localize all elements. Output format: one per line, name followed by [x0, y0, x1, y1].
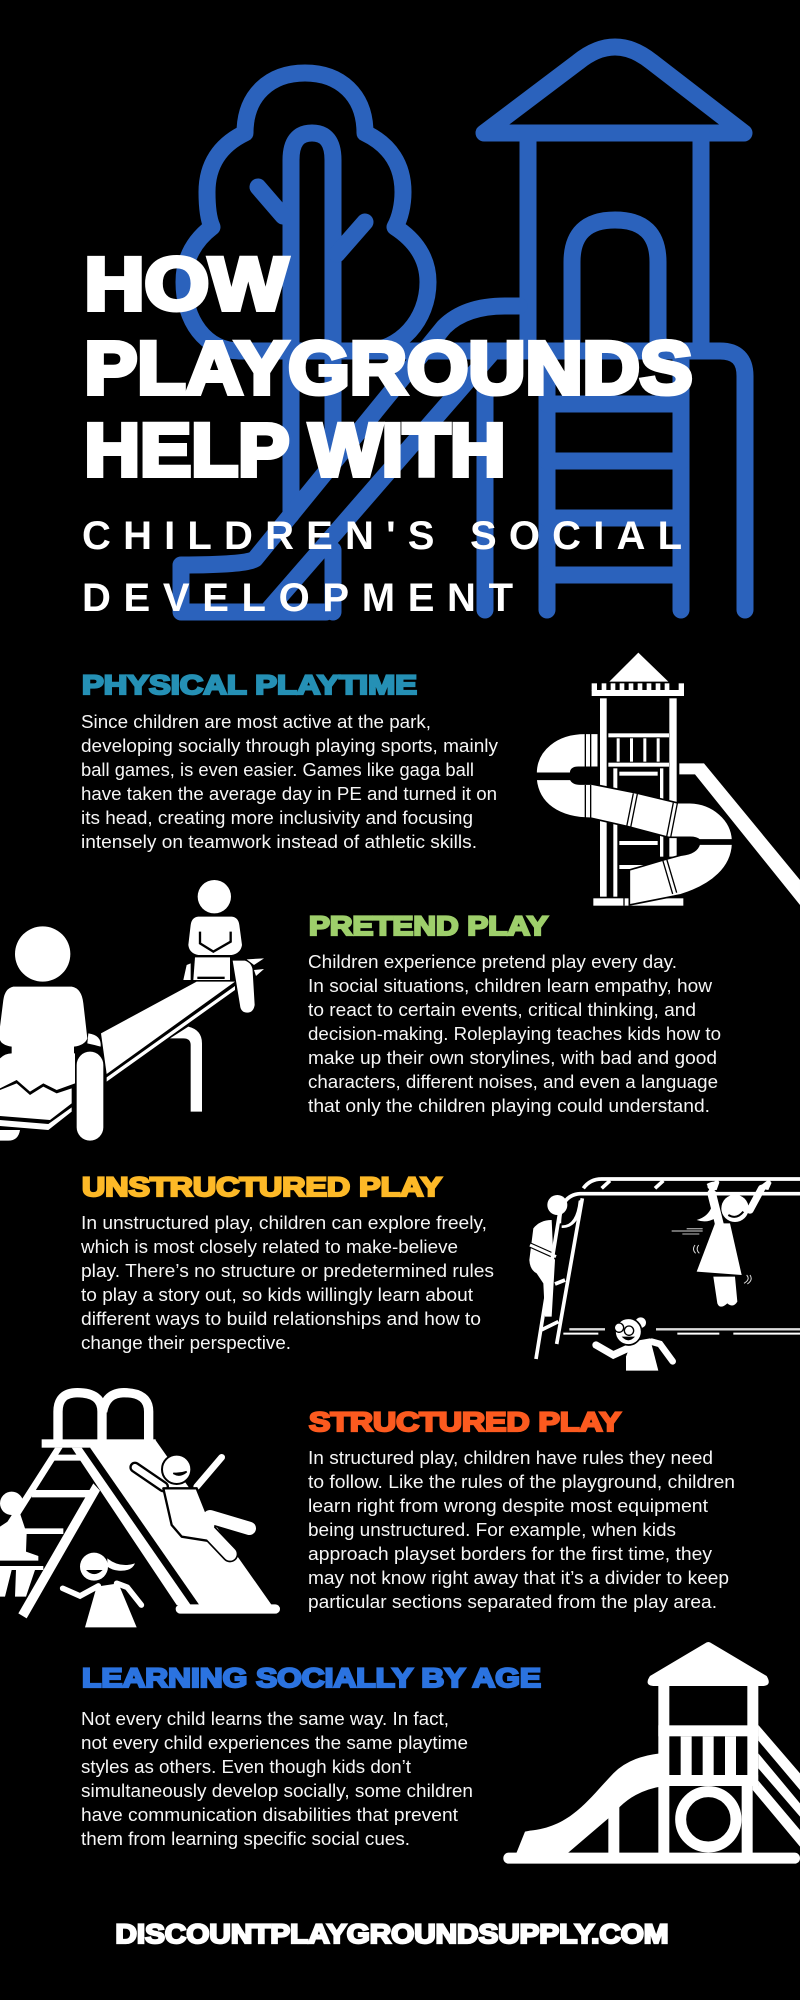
text block: pretend play: that only the children playing could understand.	[308, 1095, 710, 1116]
text block: unstructured play: In unstructured play, children can explore freely,	[81, 1212, 487, 1233]
panel: unstructured play	[80, 1172, 494, 1353]
text block: learning socially by age: not every child experiences the same playtime	[81, 1732, 468, 1753]
title: HELP WITH	[84, 408, 505, 492]
text block: pretend play: to react to certain events, critical thinking, and	[308, 999, 696, 1020]
text block: physical playtime: Since children are most active at the park,	[81, 711, 431, 732]
panel: learning socially by age	[81, 1663, 541, 1849]
text block: unstructured play	[80, 1212, 494, 1353]
text block: physical playtime: its head, creating more inclusivity and focusing	[81, 807, 473, 828]
icon: seesaw with children	[0, 880, 264, 1141]
text block: unstructured play: play. There’s no structure or predetermined rules	[81, 1260, 494, 1281]
text block: unstructured play: change their perspective.	[81, 1332, 291, 1353]
text block: pretend play: In social situations, children learn empathy, how	[308, 975, 713, 996]
text block: learning socially by age: Not every child learns the same way. In fact,	[81, 1708, 449, 1729]
text block: structured play: to follow. Like the rules of the playground, children	[308, 1471, 735, 1492]
panel: physical playtime	[81, 670, 499, 852]
title: PLAYGROUNDS	[84, 326, 692, 410]
icon: slide with children	[0, 1393, 280, 1627]
footer url: DISCOUNTPLAYGROUNDSUPPLY.COM	[116, 1919, 668, 1949]
title	[84, 242, 692, 492]
text block: structured play: particular sections separated from the play area.	[308, 1591, 717, 1612]
text block: structured play	[308, 1447, 735, 1612]
text block: physical playtime	[81, 711, 499, 852]
subtitle	[82, 514, 682, 620]
text block: unstructured play: to play a story out, so kids willingly learn about	[81, 1284, 474, 1305]
text block: unstructured play: different ways to build relationships and how to	[81, 1308, 481, 1329]
text block: physical playtime: have taken the average day in PE and turned it on	[81, 783, 497, 804]
panel: pretend play	[308, 911, 721, 1116]
text block: learning socially by age: them from learning specific social cues.	[81, 1828, 410, 1849]
heading: physical playtime: PHYSICAL PLAYTIME	[82, 670, 417, 700]
text block: physical playtime: intensely on teamwork instead of athletic skills.	[81, 831, 477, 852]
text block: pretend play: characters, different noises, and even a language	[308, 1071, 718, 1092]
text block: pretend play: Children experience pretend play every day.	[308, 951, 677, 972]
icon: blue playground outline	[181, 47, 745, 612]
text block: pretend play	[308, 951, 721, 1116]
title: HOW	[84, 242, 288, 326]
heading: structured play: STRUCTURED PLAY	[309, 1407, 621, 1437]
text block: structured play: In structured play, children have rules they need	[308, 1447, 713, 1468]
text block: learning socially by age: have communication disabilities that prevent	[81, 1804, 459, 1825]
text block: physical playtime: ball games, is even easier. Games like gaga ball	[81, 759, 474, 780]
text block: structured play: approach playset borders for the first time, they	[308, 1543, 713, 1564]
heading: unstructured play: UNSTRUCTURED PLAY	[82, 1172, 442, 1202]
text block: physical playtime: developing socially through playing sports, mainly	[81, 735, 499, 756]
text block: structured play: learn right from wrong despite most equipment	[308, 1495, 709, 1516]
text block: structured play: may not know right away that it’s a divider to keep	[308, 1567, 729, 1588]
text block: pretend play: make up their own storylines, with bad and good	[308, 1047, 717, 1068]
subtitle: CHILDREN'S SOCIAL	[82, 514, 682, 558]
text block: learning socially by age	[81, 1708, 473, 1849]
heading: learning socially by age: LEARNING SOCIALLY BY AGE	[82, 1663, 541, 1693]
subtitle: DEVELOPMENT	[82, 576, 513, 620]
text block: learning socially by age: styles as others. Even though kids don’t	[81, 1756, 412, 1777]
text block: structured play: being unstructured. For example, when kids	[308, 1519, 676, 1540]
text block: pretend play: decision-making. Roleplaying teaches kids how to	[308, 1023, 721, 1044]
text block: unstructured play: which is most closely related to make-believe	[80, 1236, 458, 1257]
text block: learning socially by age: simultaneously develop socially, some children	[81, 1780, 473, 1801]
icon: spiral slide tower	[536, 653, 800, 906]
heading: pretend play: PRETEND PLAY	[309, 911, 548, 941]
icon: monkey bars with children	[529, 1179, 800, 1371]
icon: playground fort with slide	[503, 1642, 800, 1864]
panel: structured play	[308, 1407, 735, 1612]
